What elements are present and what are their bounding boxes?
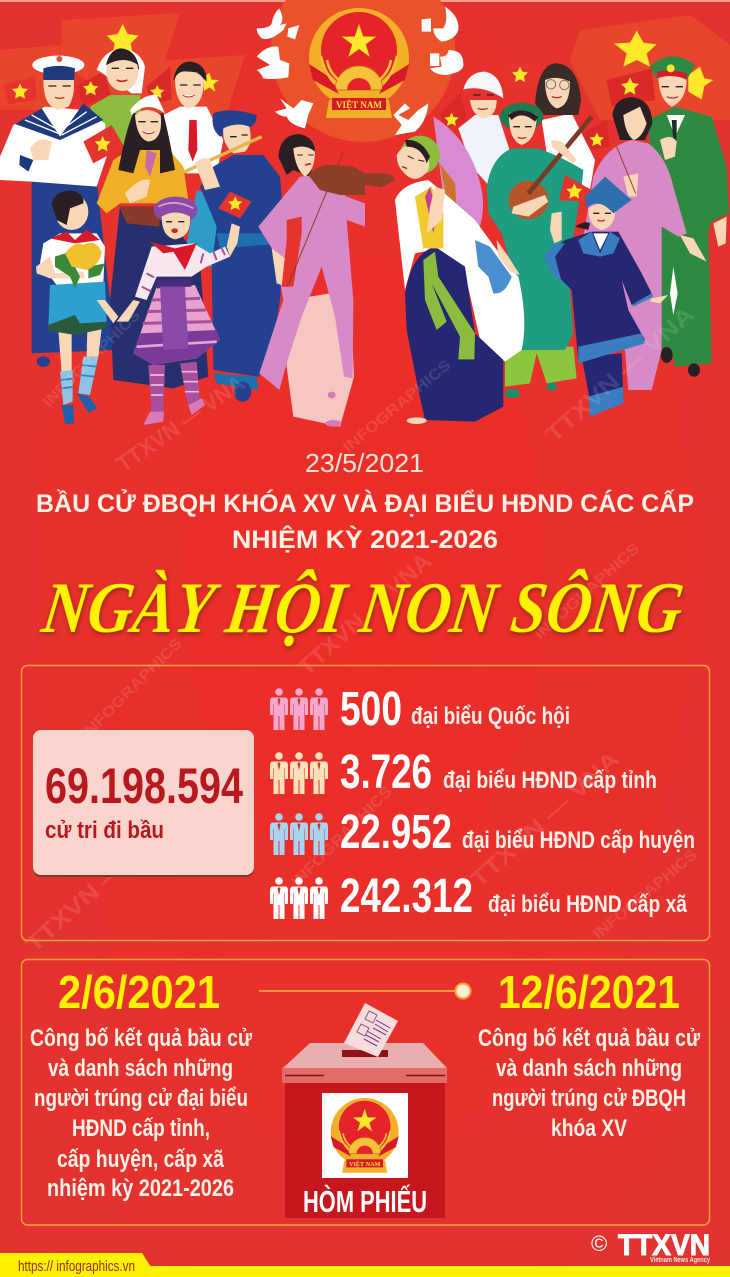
icon: three blue people (270, 813, 328, 855)
watermarks: TTXVN — VNA (112, 370, 249, 477)
card: total voters (33, 730, 254, 877)
row: National Assembly delegates: đại biểu Quốc hội (411, 703, 570, 730)
left date column: người trúng cử đại biểu (34, 1085, 248, 1112)
woman in pink ao dai (578, 97, 707, 390)
graduate girl (543, 175, 668, 417)
timeline connector (259, 984, 470, 998)
small flag centre (76, 72, 112, 105)
heading line 1: BẦU CỬ ĐBQH KHÓA XV VÀ ĐẠI BIỂU HĐND CÁC CẤP (36, 488, 694, 518)
watermarks: INFOGRAPHICS (590, 846, 700, 943)
dancer with fan (365, 117, 524, 424)
left date column (30, 966, 252, 1202)
row: commune delegates: 242.312 (340, 870, 473, 923)
emblem on ballot box: VIỆT NAM (349, 1160, 381, 1168)
illustration: crowd of Vietnamese people (0, 0, 730, 427)
woman in green with lute (487, 103, 592, 398)
emblem backdrop circle (271, 0, 455, 142)
violinist in pink ao dai (258, 134, 365, 427)
left date column: HĐND cấp tỉnh, (72, 1115, 210, 1142)
logo: TTXVN: © (591, 1231, 607, 1256)
row: district delegates: 22.952 (340, 806, 452, 859)
watermarks: TTXVN — VNA (465, 746, 624, 892)
watermarks: TTXVN — VNA (293, 548, 437, 681)
woman with glasses (535, 63, 595, 200)
watermarks: INFOGRAPHICS (288, 783, 396, 891)
footer band with source url (0, 1253, 730, 1277)
ballot paper (344, 1003, 398, 1057)
left date column: cấp huyện, cấp xã (57, 1146, 225, 1173)
small flag left (3, 76, 37, 104)
woman in yellow top (97, 95, 208, 388)
emblem on ballot box (331, 1098, 399, 1173)
row: National Assembly delegates: 500 (340, 683, 402, 736)
row: commune delegates (270, 870, 688, 923)
row: National Assembly delegates (270, 683, 570, 736)
small flag and star behind (147, 67, 219, 103)
soldier (648, 56, 729, 377)
right figures (365, 7, 729, 424)
doves left (257, 8, 313, 128)
left date column: nhiệm kỳ 2021-2026 (47, 1175, 234, 1202)
girl in purple costume (117, 192, 252, 425)
footer band with source url: https:// infographics.vn (18, 1258, 135, 1275)
logo: TTXVN: TTXVN (618, 1229, 710, 1262)
left figures (0, 24, 365, 427)
woman in white cap and green shirt (90, 48, 145, 147)
sailor (0, 56, 124, 367)
ballot box label: HÒM PHIẾU (303, 1183, 427, 1219)
right date column (478, 966, 700, 1142)
panel: voter and delegate totals (22, 666, 710, 940)
right date column: khóa XV (551, 1115, 627, 1142)
watermarks: INFOGRAPHICS (340, 357, 454, 456)
doves right (393, 7, 463, 135)
right date column: 12/6/2021 (498, 966, 680, 1018)
watermarks: TTXVN — VNA (20, 811, 179, 957)
watermarks: INFOGRAPHICS (40, 307, 144, 411)
watermarks (20, 301, 700, 957)
left date column: Công bố kết quả bầu cử (30, 1025, 252, 1052)
left date column: 2/6/2021 (58, 966, 220, 1018)
heading line 2: NHIỆM KỲ 2021-2026 (232, 524, 498, 554)
right date column: và danh sách những (496, 1055, 682, 1082)
panel: result dates (22, 960, 710, 1225)
watermarks: TTXVN — VNA (540, 301, 699, 447)
star (107, 24, 139, 54)
row: district delegates (270, 806, 695, 859)
left date column: và danh sách những (48, 1055, 233, 1082)
stars and flags (440, 31, 713, 150)
row: provincial delegates: 3.726 (340, 746, 432, 799)
national emblem top (309, 8, 409, 118)
icon: three peach people (270, 752, 328, 794)
row: provincial delegates (270, 746, 657, 799)
date: 23/5/2021 (305, 448, 424, 478)
woman with navy hat playing flute (177, 110, 285, 402)
background flags (0, 13, 730, 135)
row: provincial delegates: đại biểu HĐND cấp tỉnh (443, 767, 657, 794)
ballot box (282, 1003, 447, 1219)
row: commune delegates: đại biểu HĐND cấp xã (488, 891, 688, 918)
boy with flowers (36, 191, 118, 424)
voter label: cử tri đi bầu (45, 817, 164, 844)
man in white helmet (458, 72, 512, 187)
logo: TTXVN (591, 1229, 710, 1264)
heading block (36, 448, 694, 648)
watermarks: INFOGRAPHICS (531, 540, 643, 643)
voter count: 69.198.594 (45, 758, 243, 814)
icon: three pink people (270, 688, 328, 730)
man in white shirt and red tie (163, 62, 223, 173)
national emblem top: VIỆT NAM (336, 100, 383, 110)
icon: three white people (270, 877, 328, 919)
watermarks: INFOGRAPHICS (78, 635, 186, 743)
logo: TTXVN: Vietnam News Agency (650, 1257, 710, 1264)
